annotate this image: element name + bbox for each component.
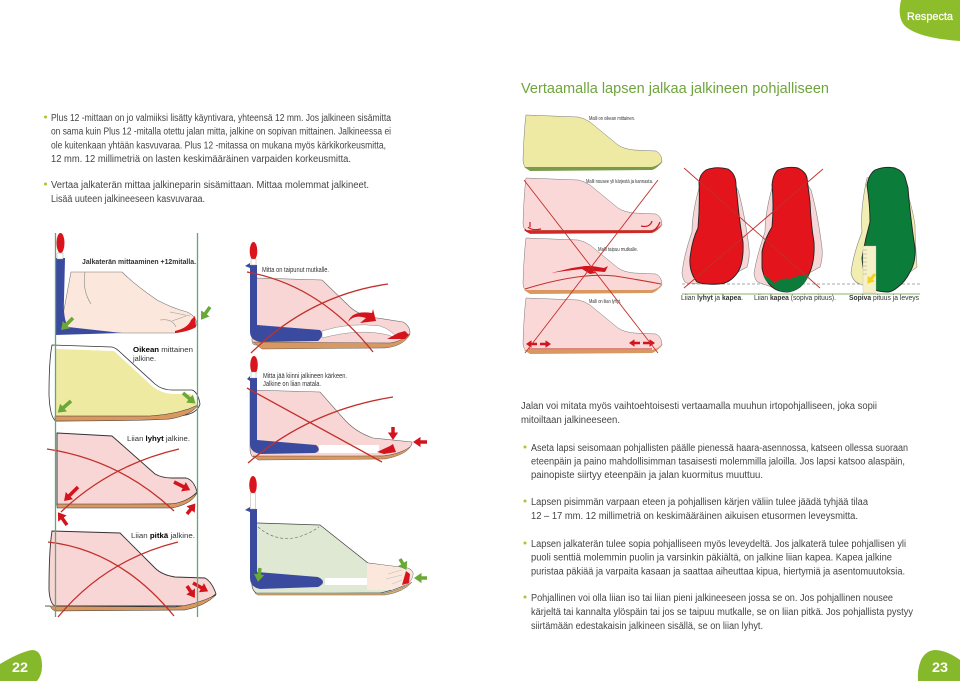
label: Mitta on taipunut mutkalle. — [262, 267, 329, 274]
diagram: insole correct — [523, 115, 662, 171]
page number 22: 22 — [12, 659, 28, 675]
diagram: insole too short: Malli on liian lyhyt. — [589, 299, 621, 305]
text block: right column: puoli senttiä molemmin puolin ja varsinkin päkiältä, on jalkine liian kapea. Kapea jalkine — [531, 552, 892, 564]
diagram: measure stuck, shoe too low: Jalkine on liian matala. — [263, 381, 321, 388]
foot with measure — [55, 233, 210, 335]
diagram: bent measure — [245, 242, 410, 353]
diagram: measure stuck, shoe too low — [247, 356, 427, 463]
text block: right column: siirtämään edestakaisin jalkineen sisällä, se on liian lyhyt. — [531, 621, 763, 632]
shoe: too long: Liian pitkä jalkine. — [131, 533, 195, 540]
shoe: correct size: Oikean mittainen — [133, 347, 193, 354]
text block: right column: 12 – 17 mm. 12 millimetriä on keskimääräinen aikuisen etusormen leveysmitta. — [531, 511, 858, 522]
text block: right column: Lapsen jalkaterän tulee sopia pohjalliseen myös leveydeltä. Jos jalkaterä tulee pohjallisen yli — [531, 539, 906, 550]
text block: right column: Jalan voi mitata myös vaihtoehtoisesti vertaamalla muuhun irtopohjalliseen, joka sopii — [521, 401, 877, 412]
diagram: insole rises at tip and heel — [523, 178, 662, 234]
brand tab: Respecta — [900, 0, 960, 41]
text block: right column: Pohjallinen voi olla liian iso tai liian pieni jalkineeseen jossa se on. Jos pohjallinen nousee — [531, 593, 893, 604]
brand tab: Respecta: Respecta — [907, 11, 954, 23]
text block: left bullets — [44, 113, 391, 205]
ruler — [863, 246, 876, 293]
footprint: correct — [849, 167, 919, 302]
shoe: correct size — [49, 345, 200, 421]
diagram: measuring the foot and shoes — [45, 233, 216, 617]
text block: right column: painopiste siirtyy eteenpäin ja jalan kuormitus muuttuu. — [531, 470, 763, 481]
shoe: too long — [45, 531, 216, 617]
foot with measure: Jalkaterän mittaaminen +12mitalla. — [82, 259, 196, 266]
text block: left bullets: 12 mm. 12 millimetriä on lasten keskimääräinen varpaiden korkeusmitta. — [51, 154, 351, 165]
shoe: too short: Liian lyhyt jalkine. — [127, 436, 190, 443]
footprint: too short and narrow: Liian lyhyt ja kapea. — [681, 295, 743, 302]
page number 23 — [918, 650, 960, 681]
page number 22 — [0, 650, 42, 681]
text block: left bullets: Lisää uuteen jalkineeseen kasvuvaraa. — [51, 194, 205, 205]
text block: left bullets: Vertaa jalkaterän mittaa jalkineparin sisämittaan. Mittaa molemmat jalkineet. — [51, 180, 369, 191]
text block: right column — [521, 401, 913, 632]
diagram: insole bends: Malli taipuu mutkalle. — [598, 247, 638, 253]
crosses over the wrong footprints — [684, 168, 823, 288]
footprint: correct: Sopiva pituus ja leveys — [849, 295, 919, 302]
text block: right column: eteenpäin ja paino mahdollisimman tasaisesti molemmilla jaloilla. Jos lapsi katsoo alaspäin, — [531, 456, 905, 468]
diagram: insole too short — [523, 298, 662, 354]
footprint: too narrow: Liian kapea (sopiva pituus). — [754, 295, 836, 302]
diagram: insole rises at tip and heel: Malli nousee yli kärjestä ja kannasta. — [586, 179, 653, 185]
label: Mitta jää kiinni jalkineen kärkeen. — [263, 373, 347, 380]
text block: right column: Aseta lapsi seisomaan pohjallisten päälle pienessä haara-asennossa, katseen ollessa suoraan — [531, 443, 908, 454]
text block: right column: puristaa päkiää ja varpaita kasaan ja saattaa aiheuttaa kipua, hiertymiä ja asentomuutoksia. — [531, 566, 905, 578]
shoe: too short — [47, 433, 197, 525]
footprint: too narrow — [754, 167, 836, 302]
text block: left bullets: Plus 12 -mittaan on jo valmiiksi lisätty käyntivara, yhteensä 12 mm. Jos jalkineen sisämitta — [51, 113, 391, 124]
diagram: footprints on insoles — [681, 167, 920, 302]
footprint: too short and narrow — [681, 168, 749, 302]
text block: right column: kärjeltä tai kannalta ylöspäin tai jos se taipuu mutkalle, se on liian pitkä. Jos pohjallista pystyy — [531, 607, 913, 618]
page number 23: 23 — [932, 659, 948, 675]
cross over the wrong insoles — [524, 180, 658, 353]
text block: right column: mitoiltaan jalkineeseen. — [521, 415, 620, 426]
text block: right column: Lapsen pisimmän varpaan eteen ja pohjallisen kärjen väliin tulee jäädä tyhjää tilaa — [531, 497, 868, 508]
heading: Vertaamalla lapsen jalkaa jalkineen pohjalliseen — [521, 80, 829, 97]
diagram: insole correct: Malli on oikean mittainen. — [589, 116, 635, 122]
diagram: insole bends — [523, 238, 662, 294]
text block: left bullets: ole kuitenkaan yhtään kasvuvaraa. Plus 12 -mitassa on mukana myös kärkikorkeusmitta, — [51, 140, 386, 152]
diagram: correct fit with measure — [245, 476, 427, 595]
shoe: correct size: jalkine. — [132, 356, 156, 363]
text block: left bullets: on sama kuin Plus 12 -mitalla otettu jalan mitta, jalkine on sopivan mittainen. Jalkineessa ei — [51, 126, 391, 138]
